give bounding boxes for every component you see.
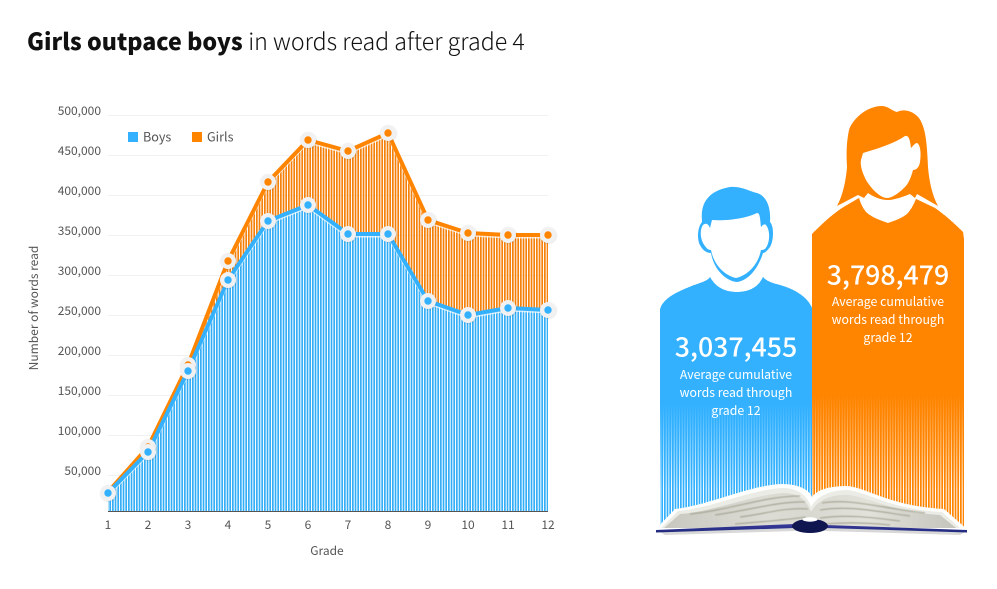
x-axis labels: 7 (345, 516, 352, 533)
boy stat (675, 326, 797, 419)
girls area (108, 133, 548, 511)
y-axis gridlines (108, 116, 548, 476)
legend (128, 126, 234, 146)
x-axis labels: 9 (425, 516, 431, 533)
panel: boy figure (660, 187, 812, 528)
girl body (812, 198, 964, 528)
baseline (108, 510, 548, 512)
boys area (108, 205, 548, 511)
girls line (108, 133, 548, 492)
y-axis labels: 450,000 (58, 142, 101, 159)
y-axis labels: 400,000 (58, 182, 101, 199)
girl stat (827, 254, 949, 346)
boys markers (100, 197, 556, 501)
panel: girl figure (812, 106, 964, 528)
icon: open book (655, 484, 968, 535)
girl stat: 3,798,479 (827, 254, 949, 292)
y-axis labels: 350,000 (58, 222, 101, 239)
title: Girls outpace boysin words read after grade 4 (27, 23, 525, 57)
boy stat: grade 12 (711, 401, 761, 419)
x-axis labels: 4 (225, 516, 232, 533)
x-axis labels: 1 (105, 516, 111, 533)
icon: girl head (837, 106, 938, 206)
girl stat: grade 12 (863, 328, 913, 346)
x-axis labels: 2 (145, 516, 152, 533)
x-axis labels: 8 (385, 516, 392, 533)
boy stat: 3,037,455 (675, 326, 797, 364)
y-axis labels: 250,000 (58, 302, 101, 319)
y-axis title: Number of words read (25, 246, 42, 370)
x-axis labels: 6 (305, 516, 312, 533)
boy body (660, 277, 812, 528)
legend: Boys (143, 126, 171, 146)
y-axis labels: 200,000 (58, 342, 101, 359)
x-axis labels: 11 (501, 516, 515, 533)
x-axis labels: 5 (265, 516, 272, 533)
y-axis labels: 150,000 (58, 382, 101, 399)
y-axis labels: 300,000 (58, 262, 101, 279)
y-axis labels: 100,000 (58, 422, 101, 439)
girls markers (140, 125, 556, 455)
x-axis labels: 10 (461, 516, 475, 533)
x-axis labels: 12 (541, 516, 555, 533)
line chart: words read by grade (25, 102, 556, 559)
x-axis title: Grade (310, 542, 344, 559)
legend: Girls (207, 126, 234, 146)
icon: boy head (698, 187, 773, 282)
x-axis labels: 3 (185, 516, 191, 533)
y-axis labels: 50,000 (64, 462, 101, 479)
x-axis labels (105, 516, 555, 533)
boy stat: words read through (680, 383, 792, 401)
boy stat: Average cumulative (680, 365, 792, 383)
y-axis labels (58, 102, 101, 479)
girl stat: Average cumulative (832, 292, 944, 310)
girl stat: words read through (832, 310, 944, 328)
boys line (108, 205, 548, 495)
y-axis labels: 500,000 (58, 102, 101, 119)
